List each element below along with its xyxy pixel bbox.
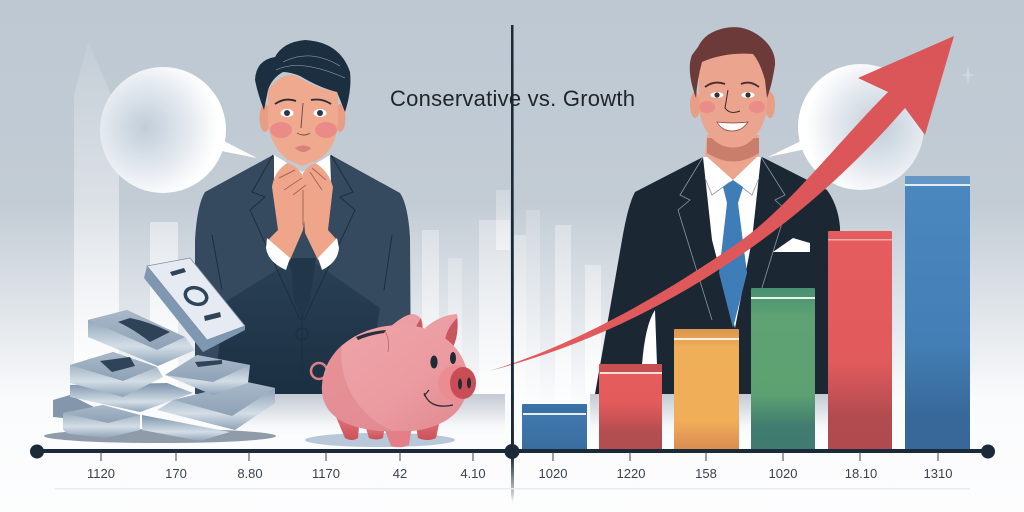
bar 4 bbox=[751, 288, 815, 451]
table surface: left bbox=[235, 394, 505, 439]
body bbox=[322, 325, 468, 431]
ears bbox=[690, 92, 700, 118]
hair bbox=[255, 40, 350, 112]
eyes and brows bbox=[710, 92, 724, 98]
suit bbox=[195, 155, 411, 394]
shirt bbox=[703, 157, 761, 328]
snout bbox=[438, 365, 474, 401]
middle left note bbox=[70, 352, 163, 397]
face bbox=[698, 50, 767, 148]
axis labels: left: 42 bbox=[393, 466, 407, 481]
sparkle bbox=[959, 66, 977, 84]
person: conservative investor bbox=[195, 40, 411, 394]
person: growth investor bbox=[595, 27, 842, 394]
axis labels: left: 8.80 bbox=[237, 466, 263, 481]
neck bbox=[705, 135, 759, 180]
shirt cuffs bbox=[266, 238, 339, 270]
eyes and brows bbox=[280, 109, 294, 117]
bar 2 bbox=[599, 364, 662, 451]
shirt collar bbox=[274, 155, 331, 190]
middle right note bbox=[165, 355, 250, 395]
axis labels: right bbox=[539, 466, 952, 481]
divider bbox=[511, 25, 514, 505]
axis labels: left: 170 bbox=[165, 466, 187, 481]
smile bbox=[717, 122, 748, 131]
axis labels: right: 18.10 bbox=[845, 466, 877, 481]
speech bubble: right bbox=[768, 64, 924, 190]
tie bbox=[719, 180, 747, 328]
bar 5 bbox=[828, 231, 892, 451]
bar 3 bbox=[674, 329, 739, 451]
lower middle note bbox=[70, 383, 193, 412]
speech bubble: left bbox=[100, 67, 257, 193]
axis labels: left: 4.10 bbox=[460, 466, 486, 481]
axis labels: right: 1020 bbox=[769, 466, 797, 481]
axis labels: left: 1170 bbox=[312, 466, 340, 481]
eyes bbox=[430, 356, 438, 368]
back note bbox=[53, 395, 100, 418]
ears bbox=[260, 104, 270, 132]
upper left note bbox=[88, 310, 195, 366]
bottom left note bbox=[63, 405, 140, 438]
top note bbox=[144, 266, 245, 352]
piggy bank bbox=[305, 314, 476, 447]
coin slot bbox=[356, 330, 386, 340]
bar chart: growth bbox=[522, 176, 970, 451]
stack of cash bbox=[44, 258, 276, 443]
axis labels: right: 1310 bbox=[924, 466, 952, 481]
bottom right note bbox=[142, 415, 230, 441]
hands bbox=[268, 163, 308, 260]
axis labels: right: 158 bbox=[695, 466, 717, 481]
suit bbox=[595, 157, 842, 394]
growth arrow bbox=[489, 36, 954, 371]
axis labels: left bbox=[87, 466, 486, 481]
mouth bbox=[295, 146, 311, 152]
legs bbox=[333, 410, 360, 440]
lapels bbox=[678, 157, 786, 320]
axis labels: right: 1020 bbox=[539, 466, 567, 481]
pocket square bbox=[773, 238, 810, 252]
face bbox=[268, 75, 338, 166]
tail bbox=[311, 363, 327, 379]
axis labels: left: 1120 bbox=[87, 466, 115, 481]
ears bbox=[390, 314, 423, 356]
bar 6 bbox=[905, 176, 970, 451]
background skyline bbox=[74, 42, 601, 402]
hair bbox=[690, 27, 775, 98]
title: Conservative vs. Growth bbox=[390, 86, 635, 111]
axis labels: right: 1220 bbox=[617, 466, 645, 481]
smile bbox=[424, 390, 453, 406]
table surface: right bbox=[590, 394, 845, 439]
timeline axis bbox=[30, 444, 995, 461]
bar 1 bbox=[522, 404, 587, 451]
